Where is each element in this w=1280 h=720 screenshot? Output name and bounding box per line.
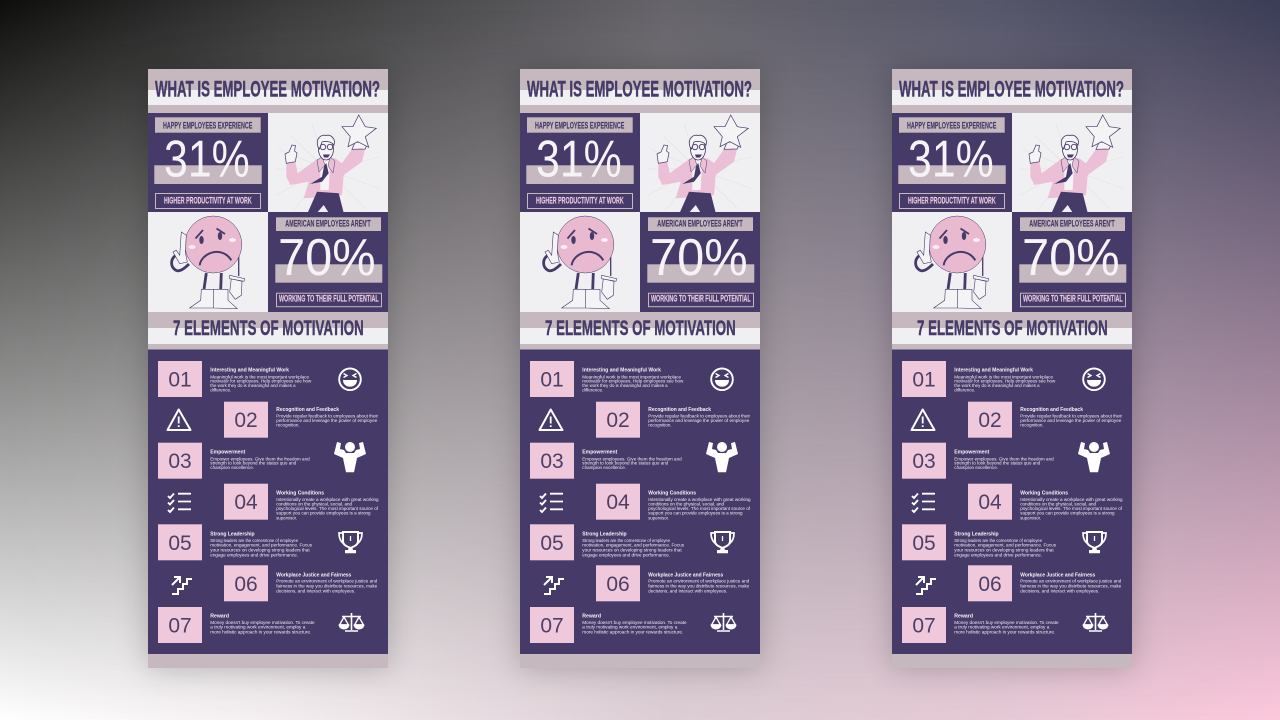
element 04 — [224, 484, 379, 521]
element 05: Strong Leadership — [210, 531, 255, 537]
element 07: more holistic approach in your rewards structure. — [954, 630, 1055, 635]
element 06: 06 — [978, 573, 1002, 596]
element 03: 03 — [540, 450, 564, 473]
element 04: support you can provide employees is a strong — [648, 511, 743, 516]
element 01 — [158, 361, 312, 397]
element 07: Reward — [582, 614, 601, 620]
element 03: strength to look beyond the status quo and — [582, 461, 669, 466]
icon: muscle figure — [334, 442, 366, 472]
element 07: Reward — [210, 614, 229, 620]
element 04: support you can provide employees is a strong — [276, 511, 371, 516]
element 07 — [530, 607, 687, 643]
element 04: Working Conditions — [276, 490, 324, 496]
element 05: Strong leaders are the cornerstone of employee — [582, 538, 670, 543]
element 02: Recognition and Feedback — [276, 407, 339, 413]
element 06: Workplace Justice and Fairness — [276, 572, 351, 578]
stat: 70 percent — [275, 217, 382, 307]
element 05: 05 — [168, 532, 192, 555]
element 03 — [158, 443, 310, 479]
element 06: decisions, and interact with employees. — [1020, 589, 1099, 594]
icon: warning — [168, 410, 190, 430]
element 05: Strong Leadership — [582, 531, 627, 537]
icon: trophy — [711, 532, 734, 553]
element 02: recognition. — [1020, 422, 1044, 427]
panel: elements list — [520, 350, 760, 654]
element 07: a truly motivating work environment, employ a — [582, 625, 678, 630]
element 06: fairness in the way you distribute resources, make — [648, 583, 750, 588]
panel: infographic left — [148, 69, 388, 668]
icon: trophy — [339, 532, 362, 553]
element 03: strength to look beyond the status quo and — [954, 461, 1041, 466]
element 02: performance and leverage the power of employee — [276, 418, 378, 423]
element 04 — [968, 484, 1123, 521]
element 03: Empowerment — [582, 450, 617, 456]
element 04: Working Conditions — [648, 490, 696, 496]
element 05: your resources on developing strong leaders that — [210, 548, 310, 553]
stat: 31 percent: HIGHER PRODUCTIVITY AT WORK — [536, 195, 624, 206]
element 05: your resources on developing strong leaders that — [582, 548, 682, 553]
icon: stairs — [916, 577, 936, 594]
icon: laughing face — [339, 368, 361, 390]
element 05: motivation, engagement, and performance. Focus — [954, 543, 1057, 548]
element 04: Intentionally create a workplace with great working — [276, 497, 379, 502]
element 06: Promote an environment of workplace justice and — [1020, 579, 1122, 584]
icon: laughing face — [1083, 368, 1105, 390]
element 01: 01 — [912, 368, 936, 392]
stat: 31 percent: 31% — [536, 131, 622, 189]
element 07: Money doesn't buy employee motivation. To create — [954, 620, 1059, 625]
panel: infographic right — [892, 69, 1132, 668]
element 01: motivator for employees. Help employees see how — [582, 379, 684, 384]
element 03: 03 — [168, 450, 192, 473]
element 02 — [596, 402, 750, 438]
element 03: champion excellence. — [210, 465, 254, 470]
element 06: decisions, and interact with employees. — [276, 589, 355, 594]
element 01: Interesting and Meaningful Work — [954, 368, 1033, 374]
element 07 — [902, 607, 1059, 643]
stat: 31 percent — [526, 117, 634, 208]
stat: 31 percent: HAPPY EMPLOYEES EXPERIENCE — [163, 120, 252, 131]
element 05: Strong Leadership — [954, 531, 999, 537]
stat: 31 percent: 31% — [908, 131, 994, 189]
element 01: Interesting and Meaningful Work — [210, 368, 289, 374]
element 03: champion excellence. — [954, 465, 998, 470]
panel: infographic center — [520, 69, 760, 668]
element 01: Meaningful work is the most important workplace — [954, 374, 1053, 379]
element 03: Empower employees. Give them the freedom and — [954, 456, 1054, 461]
icon: checklist — [168, 494, 191, 512]
element 04: Intentionally create a workplace with great working — [648, 497, 751, 502]
icon: stairs — [172, 577, 192, 594]
element 04: 04 — [606, 491, 630, 514]
element 05: 05 — [540, 532, 564, 555]
stat: 31 percent: HAPPY EMPLOYEES EXPERIENCE — [535, 120, 624, 131]
stat: 70 percent: 70% — [1022, 229, 1120, 287]
element 05: motivation, engagement, and performance. Focus — [582, 543, 685, 548]
element 04: Intentionally create a workplace with great working — [1020, 497, 1123, 502]
element 02: recognition. — [648, 422, 672, 427]
element 03: Empower employees. Give them the freedom and — [582, 456, 682, 461]
element 01: Interesting and Meaningful Work — [582, 368, 661, 374]
element 05 — [158, 524, 313, 560]
element 06 — [596, 565, 750, 601]
stat: 70 percent: 70% — [650, 229, 748, 287]
element 02: Provide regular feedback to employees about their — [648, 414, 750, 419]
element 02: 02 — [606, 409, 630, 432]
element 04: support you can provide employees is a strong — [1020, 511, 1115, 516]
element 07: 07 — [540, 614, 564, 638]
element 02: Recognition and Feedback — [648, 407, 711, 413]
illustration: sad character — [544, 216, 617, 309]
stat: 31 percent: HIGHER PRODUCTIVITY AT WORK — [908, 195, 996, 206]
element 03: Empowerment — [954, 450, 989, 456]
icon: stairs — [544, 577, 564, 594]
element 04: psychological levels. The most important source of — [276, 506, 379, 511]
element 04: supervisor. — [276, 516, 297, 521]
element 07 — [158, 607, 315, 643]
element 01 — [902, 361, 1056, 397]
stat: 31 percent: HIGHER PRODUCTIVITY AT WORK — [164, 195, 252, 206]
element 05: your resources on developing strong leaders that — [954, 548, 1054, 553]
element 03 — [530, 443, 682, 479]
element 05 — [530, 524, 685, 560]
element 04: 04 — [978, 491, 1002, 514]
element 06: fairness in the way you distribute resources, make — [1020, 583, 1122, 588]
element 07: more holistic approach in your rewards structure. — [210, 630, 311, 635]
element 01: 01 — [540, 368, 564, 392]
illustration: sad character — [916, 216, 989, 309]
element 05: engage employees and drive performance. — [954, 553, 1042, 558]
element 02: recognition. — [276, 422, 300, 427]
element 05: 05 — [912, 532, 936, 555]
element 03: strength to look beyond the status quo and — [210, 461, 297, 466]
element 01: difference. — [954, 387, 975, 392]
element 04: psychological levels. The most important source of — [1020, 506, 1123, 511]
element 06: decisions, and interact with employees. — [648, 589, 727, 594]
element 07: a truly motivating work environment, employ a — [210, 625, 306, 630]
element 01: 01 — [168, 368, 192, 392]
element 01: the work they do is meaningful and makes a — [582, 383, 668, 388]
illustration: sad character — [172, 216, 245, 309]
element 04: conditions on the physical, social, and — [1020, 501, 1096, 506]
element 02: performance and leverage the power of employee — [648, 418, 750, 423]
icon: warning — [540, 410, 562, 430]
element 03: champion excellence. — [582, 465, 626, 470]
element 04: psychological levels. The most important source of — [648, 506, 751, 511]
element 01: motivator for employees. Help employees see how — [954, 379, 1056, 384]
element 04: supervisor. — [648, 516, 669, 521]
element 02 — [224, 402, 378, 438]
element 01: the work they do is meaningful and makes a — [954, 383, 1040, 388]
icon: checklist — [540, 494, 563, 512]
element 04: 04 — [234, 491, 258, 514]
element 03: 03 — [912, 450, 936, 473]
element 07: a truly motivating work environment, employ a — [954, 625, 1050, 630]
element 06: Promote an environment of workplace justice and — [276, 579, 378, 584]
element 04: conditions on the physical, social, and — [276, 501, 352, 506]
element 06 — [224, 565, 378, 601]
element 06 — [968, 565, 1122, 601]
icon: checklist — [912, 494, 935, 512]
stat: 31 percent — [898, 117, 1006, 208]
element 05: Strong leaders are the cornerstone of employee — [954, 538, 1042, 543]
element 02: Recognition and Feedback — [1020, 407, 1083, 413]
stat: 31 percent: 31% — [164, 131, 250, 189]
element 02: 02 — [234, 409, 258, 432]
stat: 70 percent — [1019, 217, 1126, 307]
element 05 — [902, 524, 1057, 560]
element 06: fairness in the way you distribute resources, make — [276, 583, 378, 588]
icon: warning — [912, 410, 934, 430]
stat: 70 percent — [647, 217, 754, 307]
element 04: conditions on the physical, social, and — [648, 501, 724, 506]
icon: scales — [340, 613, 364, 631]
icon: muscle figure — [1078, 442, 1110, 472]
illustration: man holding star — [648, 115, 752, 213]
element 01: the work they do is meaningful and makes a — [210, 383, 296, 388]
element 06: 06 — [234, 573, 258, 596]
element 04: supervisor. — [1020, 516, 1041, 521]
element 07: Reward — [954, 614, 973, 620]
element 03: Empowerment — [210, 450, 245, 456]
stat: 70 percent: 70% — [278, 229, 376, 287]
element 03 — [902, 443, 1054, 479]
element 01 — [530, 361, 684, 397]
element 02: 02 — [978, 409, 1002, 432]
icon: muscle figure — [706, 442, 738, 472]
illustration: man holding star — [1020, 115, 1124, 213]
stat: 31 percent — [154, 117, 262, 208]
element 02: Provide regular feedback to employees about their — [1020, 414, 1122, 419]
icon: trophy — [1083, 532, 1106, 553]
element 06: Workplace Justice and Fairness — [1020, 572, 1095, 578]
panel: elements list — [148, 350, 388, 654]
element 06: Promote an environment of workplace justice and — [648, 579, 750, 584]
element 06: 06 — [606, 573, 630, 596]
element 01: difference. — [210, 387, 231, 392]
element 07: Money doesn't buy employee motivation. To create — [210, 620, 315, 625]
element 04 — [596, 484, 751, 521]
element 01: Meaningful work is the most important workplace — [210, 374, 309, 379]
element 07: 07 — [168, 614, 192, 638]
panel: elements list — [892, 350, 1132, 654]
element 07: 07 — [912, 614, 936, 638]
element 02 — [968, 402, 1122, 438]
element 01: Meaningful work is the most important workplace — [582, 374, 681, 379]
element 02: Provide regular feedback to employees about their — [276, 414, 378, 419]
element 02: performance and leverage the power of employee — [1020, 418, 1122, 423]
icon: laughing face — [711, 368, 733, 390]
element 05: motivation, engagement, and performance. Focus — [210, 543, 313, 548]
stat: 31 percent: HAPPY EMPLOYEES EXPERIENCE — [907, 120, 996, 131]
element 01: difference. — [582, 387, 603, 392]
element 05: engage employees and drive performance. — [210, 553, 298, 558]
element 04: Working Conditions — [1020, 490, 1068, 496]
illustration: man holding star — [276, 115, 380, 213]
element 03: Empower employees. Give them the freedom and — [210, 456, 310, 461]
element 05: Strong leaders are the cornerstone of employee — [210, 538, 298, 543]
element 07: Money doesn't buy employee motivation. To create — [582, 620, 687, 625]
icon: scales — [1084, 613, 1108, 631]
element 06: Workplace Justice and Fairness — [648, 572, 723, 578]
element 07: more holistic approach in your rewards structure. — [582, 630, 683, 635]
icon: scales — [712, 613, 736, 631]
element 01: motivator for employees. Help employees see how — [210, 379, 312, 384]
element 05: engage employees and drive performance. — [582, 553, 670, 558]
